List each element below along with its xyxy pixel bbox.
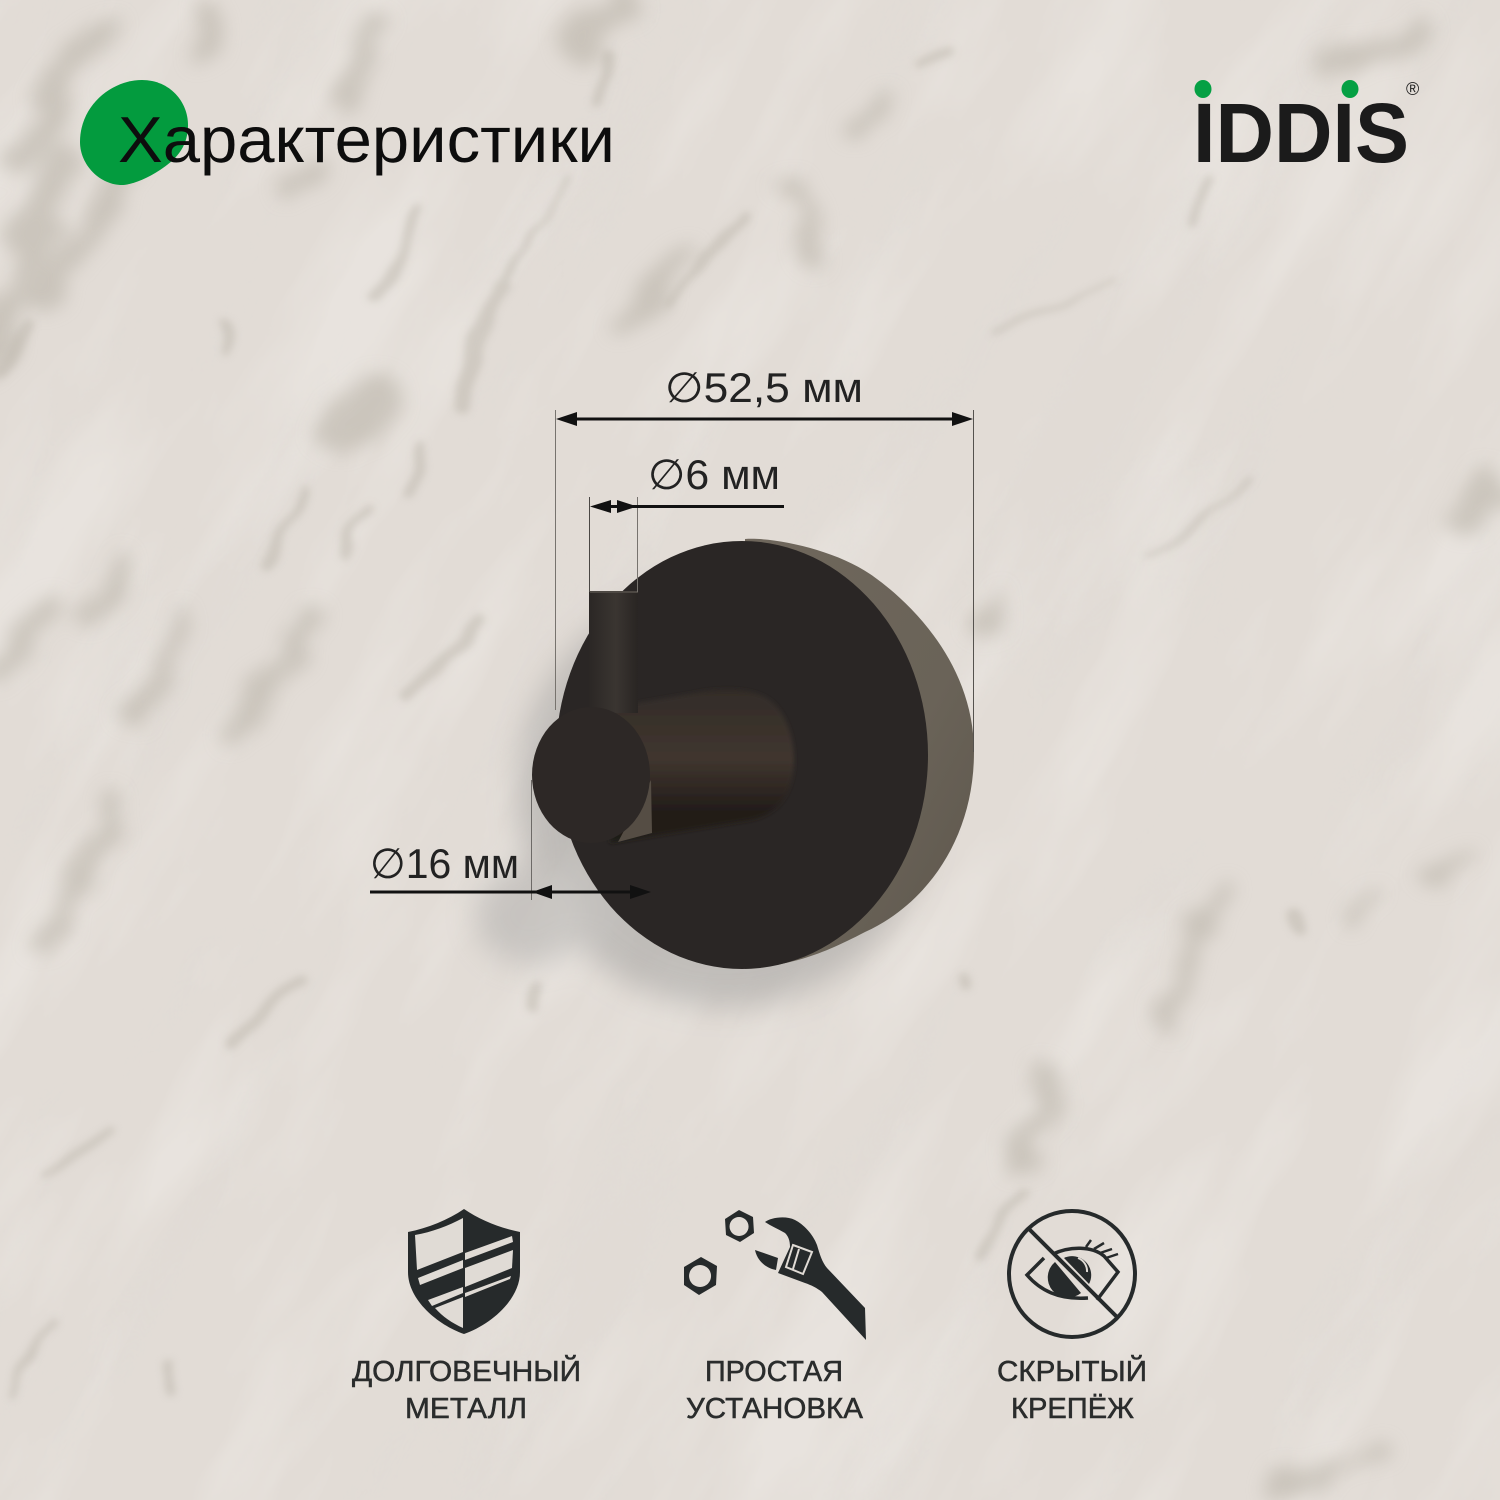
hook barrel — [610, 689, 794, 843]
icon: shield — [408, 1209, 520, 1334]
dimension: 52.5 mm — [556, 364, 974, 752]
label: ПРОСТАЯ — [705, 1356, 843, 1388]
label: СКРЫТЫЙ — [997, 1354, 1147, 1388]
hook vertical post — [589, 591, 638, 713]
green blob — [80, 80, 188, 185]
hook shadow on wall — [475, 583, 933, 1007]
dimension: 16 mm — [370, 780, 651, 900]
icon: wrench and nuts — [684, 1210, 866, 1340]
product: wall hook — [532, 539, 974, 969]
hook base rear edge — [745, 539, 974, 969]
dimension: 6 mm — [590, 451, 784, 592]
label: ДОЛГОВЕЧНЫЙ — [352, 1354, 581, 1388]
feature: easy installation: УСТАНОВКА — [686, 1393, 864, 1425]
logo: IDDIS: ® — [1406, 79, 1419, 99]
barrel light wedge — [618, 780, 652, 842]
feature: hidden fastening — [997, 1211, 1147, 1425]
icon: crossed-out eye — [1009, 1211, 1135, 1337]
title: Характеристики — [118, 103, 615, 176]
feature: durable metal — [352, 1209, 581, 1425]
hook end cap — [532, 707, 650, 843]
dimension: 16 mm: ∅16 мм — [370, 840, 519, 887]
feature: hidden fastening: КРЕПЁЖ — [1011, 1393, 1134, 1425]
dimension: 52.5 mm: ∅52,5 мм — [665, 364, 863, 411]
hook base plate — [556, 541, 928, 969]
feature: easy installation — [684, 1210, 866, 1425]
logo: IDDIS: IDDIS — [1193, 86, 1409, 180]
dimension: 6 mm: ∅6 мм — [648, 451, 780, 498]
feature: durable metal: МЕТАЛЛ — [405, 1393, 527, 1425]
heading with green blob — [80, 80, 615, 185]
